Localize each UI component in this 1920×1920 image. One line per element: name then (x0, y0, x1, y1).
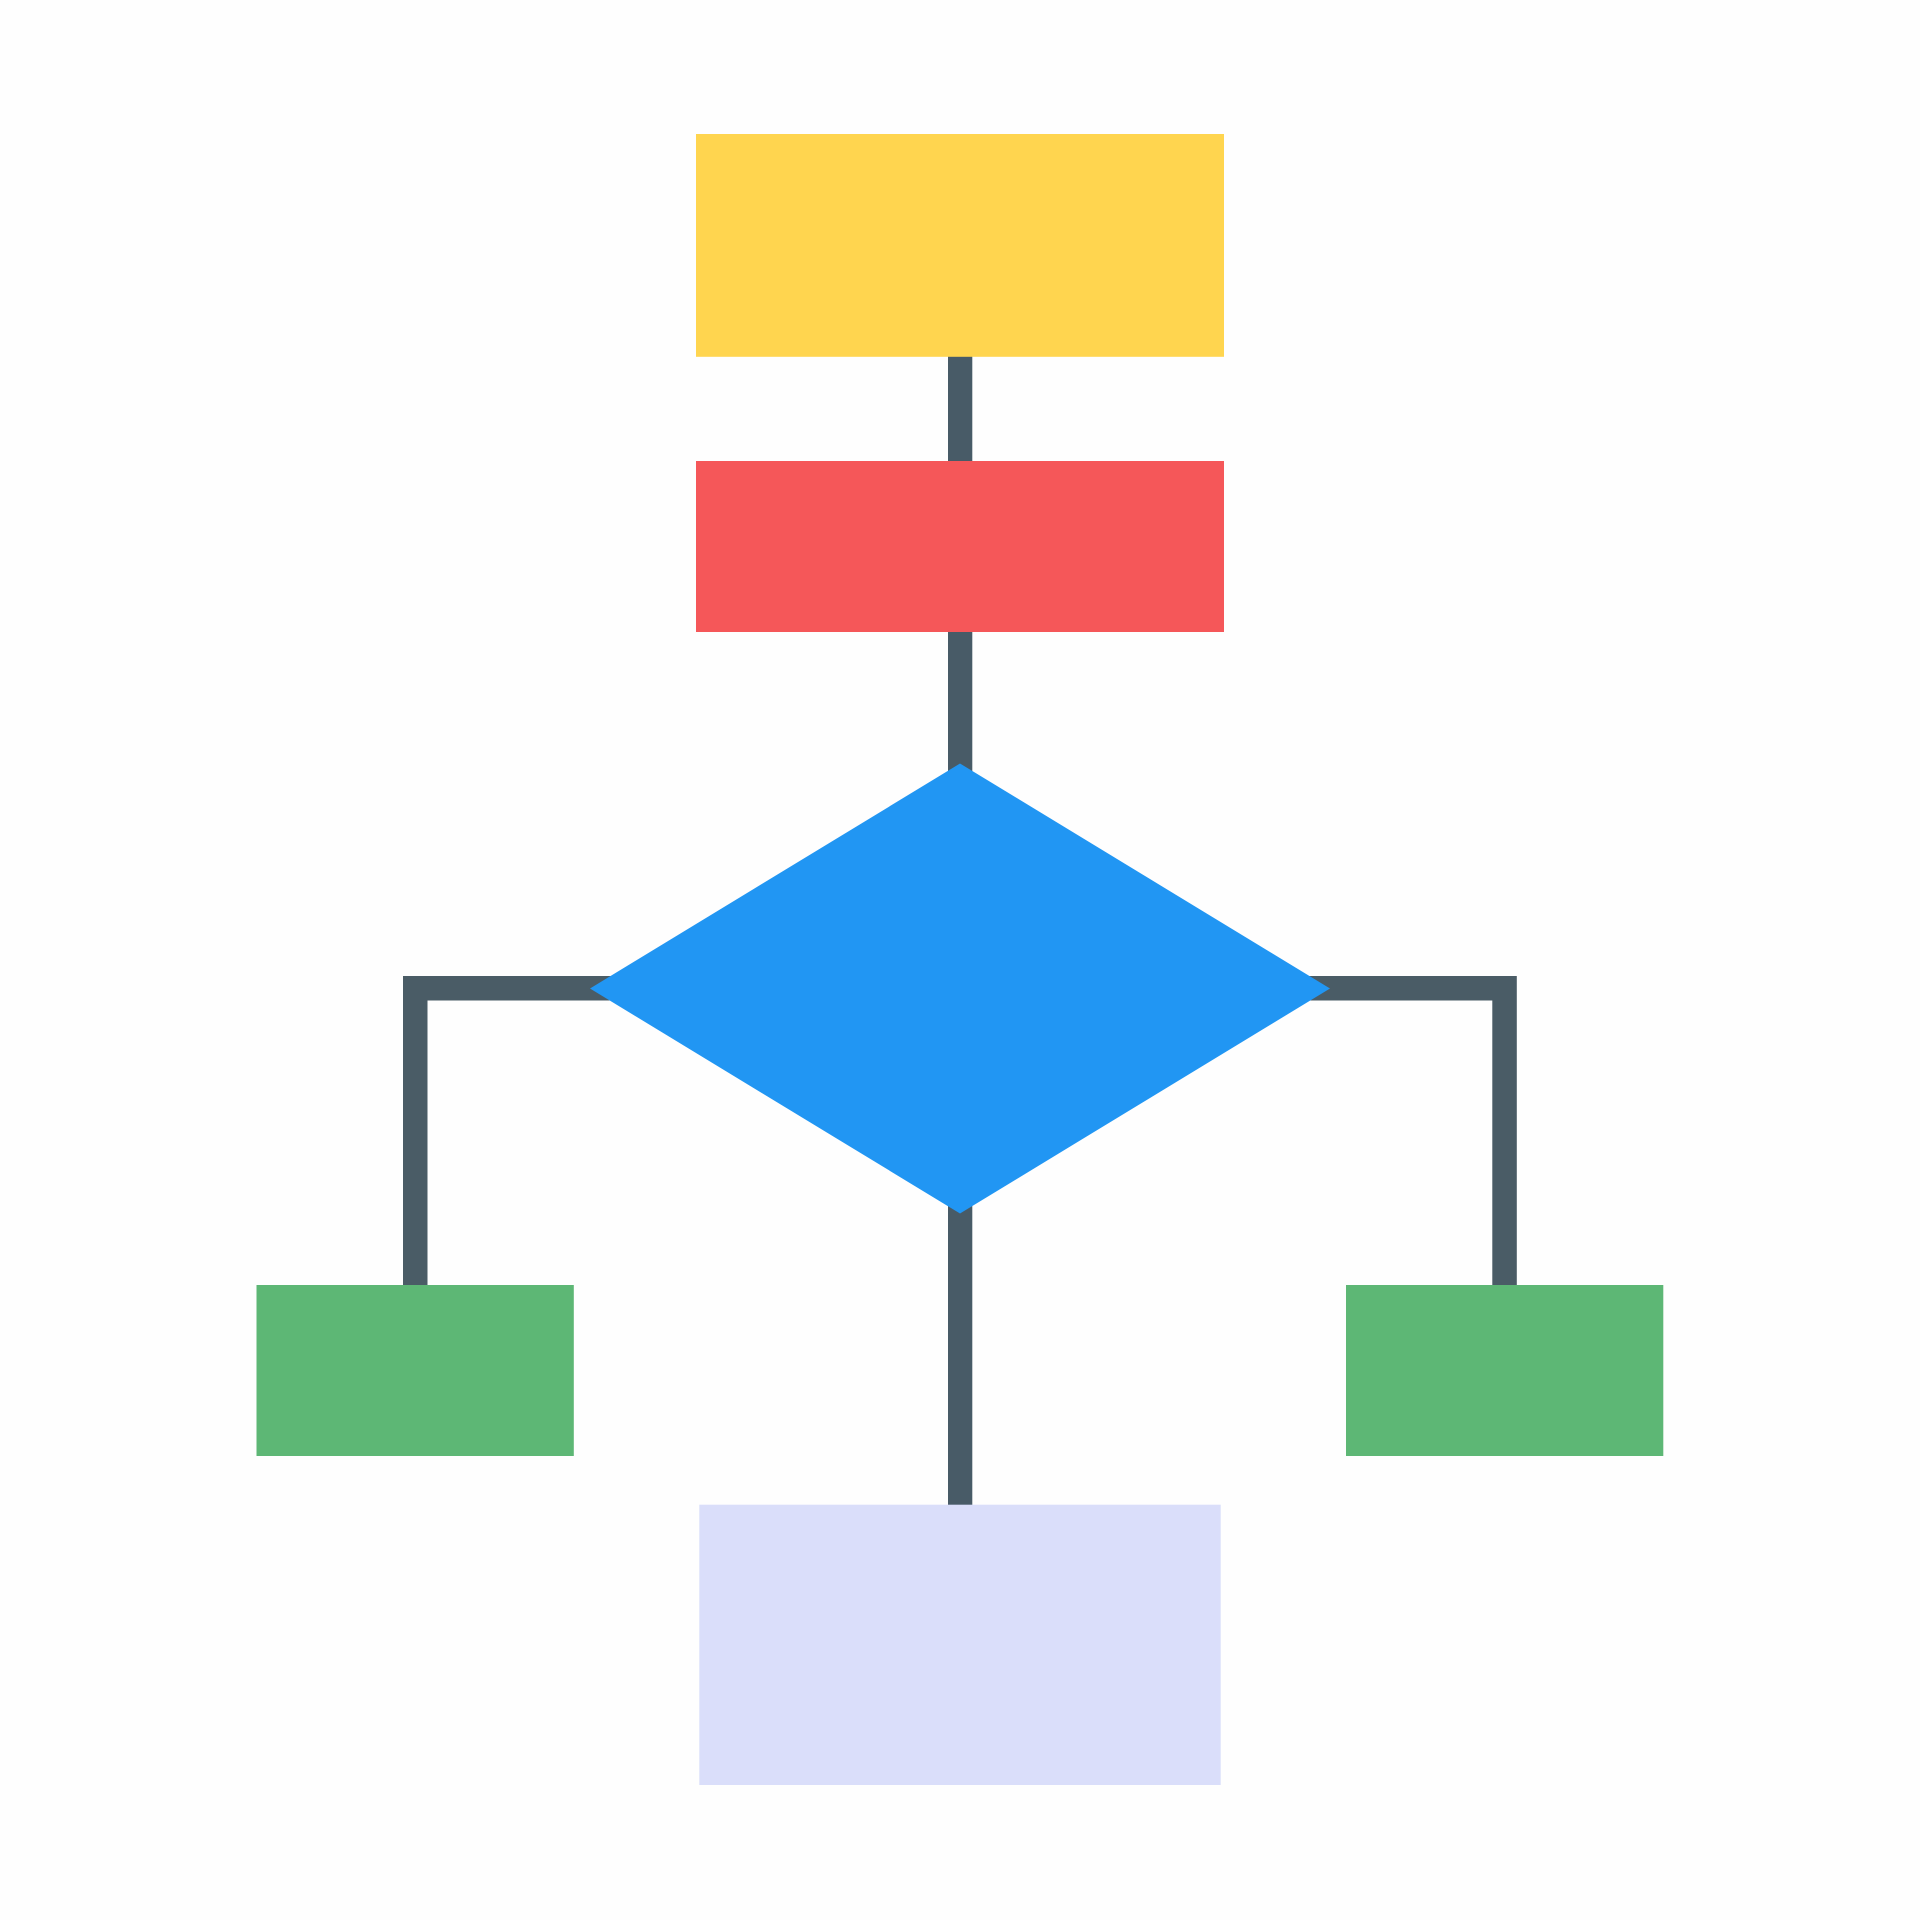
connector: process to decision (948, 626, 972, 776)
connector: decision to left outcome (403, 976, 620, 1292)
box: left outcome (green) (256, 1285, 574, 1456)
diamond: decision (blue) (590, 764, 1330, 1214)
connector: decision to end (948, 1200, 972, 1505)
box: right outcome (green) (1346, 1285, 1663, 1456)
box: end (lavender) (699, 1505, 1221, 1785)
box: process (red) (696, 461, 1224, 632)
connector: decision to right outcome (1300, 976, 1517, 1292)
connector: start to process (948, 350, 972, 468)
box: start (yellow) (696, 134, 1224, 357)
